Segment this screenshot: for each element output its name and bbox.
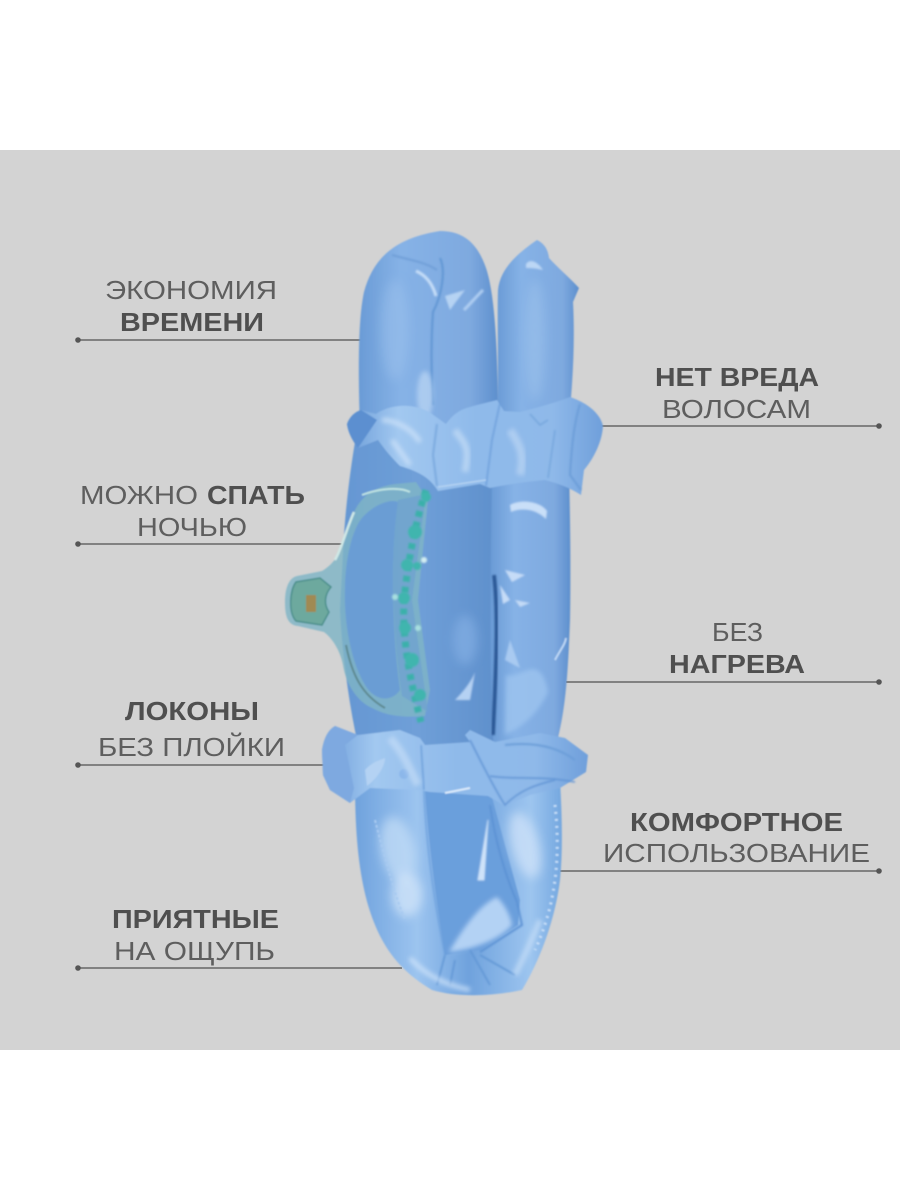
label: curls without iron: БЕЗ ПЛОЙКИ (98, 732, 285, 762)
label: curls without iron (98, 696, 285, 762)
clip spine glass (393, 494, 428, 712)
bottom center panel (425, 790, 520, 955)
clip handle tab (291, 578, 331, 625)
label: can sleep at night: МОЖНО (80, 480, 198, 510)
top fold details (381, 255, 545, 419)
product: satin heatless curlers (285, 231, 603, 995)
label: economy of time: ВРЕМЕНИ (120, 307, 264, 337)
label: comfortable use: КОМФОРТНОЕ (630, 807, 843, 837)
middle tubes (340, 430, 495, 770)
label: economy of time: ЭКОНОМИЯ (105, 275, 277, 305)
label: pleasant to touch (112, 904, 279, 966)
label: can sleep at night: НОЧЬЮ (137, 512, 247, 542)
label: comfortable use (603, 807, 870, 868)
label: can sleep at night: СПАТЬ (207, 480, 305, 510)
top scrunchie (347, 397, 603, 495)
label: without heating: БЕЗ (712, 617, 763, 647)
label: no hair damage: НЕТ ВРЕДА (655, 362, 819, 392)
bottom scrunchie (322, 726, 588, 806)
label: pleasant to touch: НА ОЩУПЬ (114, 936, 275, 966)
satin highlights on middle (453, 502, 566, 735)
clip hollow window (345, 501, 400, 698)
callout lines: right (560, 423, 882, 874)
clip frame (285, 482, 430, 717)
label: can sleep at night (80, 480, 305, 542)
label: without heating: НАГРЕВА (669, 649, 805, 679)
right tube top (497, 240, 579, 430)
label: comfortable use: ИСПОЛЬЗОВАНИЕ (603, 838, 870, 868)
label: without heating (669, 617, 805, 679)
background panel (0, 150, 900, 1050)
label: curls without iron: ЛОКОНЫ (125, 696, 259, 726)
label: no hair damage: ВОЛОСАМ (662, 394, 811, 424)
label: pleasant to touch: ПРИЯТНЫЕ (112, 904, 279, 934)
label: no hair damage (655, 362, 819, 424)
left tube top (359, 231, 498, 430)
bottom section (355, 780, 562, 995)
dark gap between tubes (493, 575, 497, 735)
label: economy of time (105, 275, 277, 337)
clip: transparent claw (285, 482, 431, 722)
callout lines: left (75, 337, 402, 971)
clip teeth (404, 490, 426, 722)
gathered tip folds (437, 950, 515, 985)
